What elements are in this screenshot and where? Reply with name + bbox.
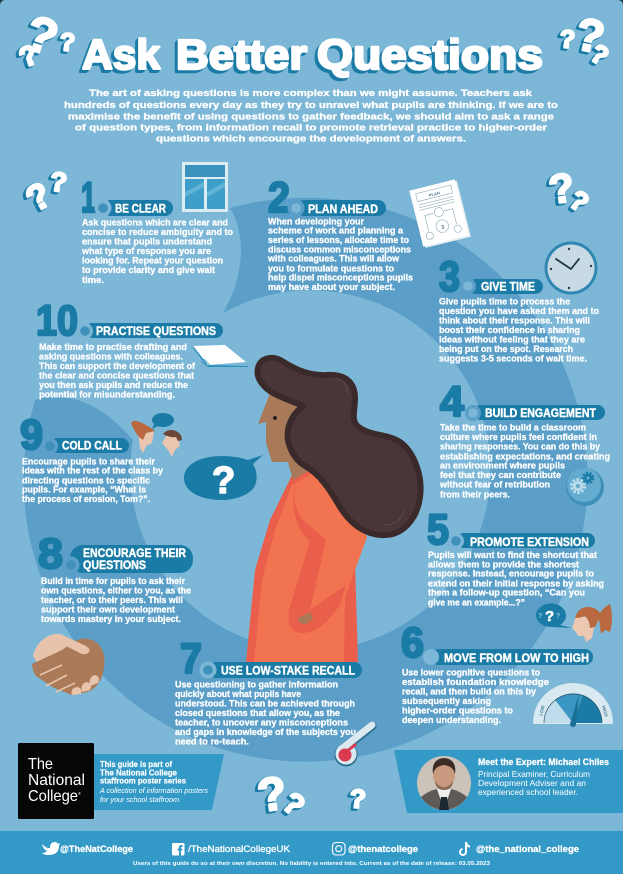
title: Ask (82, 31, 161, 78)
icon: two talking heads with bubble (131, 413, 182, 457)
body text: help dispel misconceptions pupils (268, 273, 413, 283)
panel: national college logo (18, 743, 94, 819)
question marks: top right: ? (558, 25, 576, 54)
body text: Use questioning to gather information (175, 679, 338, 689)
icon: gauge (533, 683, 613, 727)
icon: gears (566, 468, 604, 506)
intro paragraph: of question types, from information recall to promote retrieval practice to higher-order (75, 122, 547, 132)
body text: support their own development (41, 604, 175, 614)
heading pill: PROMOTE EXTENSION (470, 535, 589, 549)
body text: suggests 3-5 seconds of wait time. (439, 354, 587, 364)
body text: ensure that pupils understand (82, 236, 212, 246)
icon: pupil with question bubble: ? (545, 608, 554, 625)
question marks: top left: ? (58, 28, 76, 57)
body text: may have about your subject. (268, 282, 395, 292)
body text: what type of response you are (81, 246, 211, 256)
body text (175, 679, 356, 747)
question marks: bottom: ? (348, 783, 367, 814)
facebook handle: /TheNationalCollegeUK (188, 844, 291, 855)
heading pill: MOVE FROM LOW TO HIGH (444, 651, 589, 665)
question marks: top right of step 3 (546, 164, 594, 218)
instagram handle: @thenatcollege (348, 844, 418, 855)
body text: extend on their initial response by asking (428, 578, 604, 588)
body text: looking for. Repeat your question (82, 256, 223, 266)
body text (39, 342, 196, 399)
intro paragraph: questions which encourage the development of answers. (156, 132, 466, 144)
body text: Encourage pupils to share their (22, 456, 155, 466)
step 9: cold call (20, 411, 182, 504)
body text: Make time to practise drafting and (39, 342, 187, 352)
body text (41, 576, 191, 624)
body text: pupils. For example, “What is (22, 484, 146, 494)
step 2: plan ahead (267, 174, 471, 292)
question marks: top right: ? (585, 38, 614, 72)
body text: time. (82, 275, 104, 285)
number 10: 10 (36, 297, 78, 345)
icon: twitter (42, 842, 60, 855)
body text: teacher, or to their peers. This will (41, 595, 183, 605)
twitter handle: @TheNatCollege (60, 844, 133, 855)
intro paragraph: hundreds of questions every day as they try to unravel what pupils are thinking. If we are to (64, 99, 558, 110)
body text: you to formulate questions to (268, 263, 394, 273)
panel: poster series note: The National College (100, 768, 178, 778)
panel: national college logo: ® (78, 791, 81, 796)
tiktok handle: @the_national_college (476, 844, 579, 855)
body text: own questions, either to you, as the (41, 585, 191, 595)
panel: national college logo: The (28, 756, 53, 773)
heading pill: BUILD ENGAGEMENT (485, 406, 597, 420)
body text: When developing your (268, 216, 364, 226)
body text: need to re-teach. (175, 737, 249, 747)
body text: and gaps in knowledge of the subjects you (175, 727, 356, 737)
body text: Take the time to build a classroom (440, 423, 586, 433)
icon: pupil with question bubble: ? (556, 613, 560, 620)
body text (81, 218, 233, 285)
body text: recall, and then build on this by (402, 686, 537, 696)
heading pill: QUESTIONS (83, 558, 146, 572)
question marks: left of step 1 (18, 166, 69, 220)
icon: pupil with question bubble (536, 603, 612, 642)
body text: with colleagues. This will allow (267, 254, 400, 264)
disclaimer: Users of this guide do so at their own discretion. No liability is entered into. Current as of the date of release: 03.05.2023 (133, 861, 490, 867)
body text: directing questions to specific (22, 475, 150, 485)
question marks: top left (15, 4, 76, 74)
body text: Give pupils time to process the (439, 297, 570, 307)
body text: Pupils will want to find the shortcut that (428, 550, 597, 560)
panel: poster series note: A collection of information posters (99, 786, 208, 795)
number 3: 3 (439, 253, 460, 301)
number 1: 1 (81, 174, 96, 222)
body text: you then ask pupils and reduce the (39, 380, 188, 390)
body text: Ask questions which are clear and (82, 218, 228, 228)
hand (298, 612, 313, 624)
heading pill: USE LOW-STAKE RECALL (221, 664, 355, 678)
question marks: top left: ? (19, 4, 65, 67)
body text: question you have asked them and to (439, 306, 599, 316)
body text: culture where pupils feel confident in (440, 432, 597, 442)
face (258, 393, 320, 470)
hair (257, 358, 421, 535)
body text: teacher, to uncover any misconceptions (175, 717, 348, 727)
icon: book (193, 345, 248, 367)
body text: them a follow-up question, “Can you (428, 588, 585, 598)
step 8: encourage their questions (32, 530, 193, 695)
heading pill: PRACTISE QUESTIONS (96, 324, 216, 338)
body text: series of lessons, allocate time to (268, 235, 409, 245)
body text: scheme of work and planning a (268, 226, 404, 236)
heading pill: PLAN AHEAD (308, 202, 378, 216)
background spiral ring (24, 198, 588, 762)
expert text (478, 757, 609, 797)
question marks: top right of step 3: ? (564, 184, 594, 218)
panel: meet the expert (394, 750, 623, 813)
icon: clock (544, 242, 598, 294)
body text (267, 216, 413, 292)
panel: poster series note: for your school staffroom. (100, 795, 181, 804)
step 10: practise questions (36, 297, 248, 399)
icon: plan document: 3 (441, 224, 445, 231)
speech bubble with question mark (184, 455, 263, 502)
body text: without fear of retribution (439, 480, 550, 490)
body text: the clear and concise questions that (39, 371, 194, 381)
number 8: 8 (38, 530, 63, 578)
heading pill (460, 278, 543, 294)
panel: national college logo: National (28, 772, 85, 789)
body text: to provide clarity and give wait (82, 265, 215, 275)
question marks: bottom: ? (254, 765, 290, 822)
question marks: top right: ? (571, 7, 609, 64)
body text (439, 423, 610, 500)
step 6: move from low to high (401, 619, 613, 727)
question marks: left of step 1: ? (19, 173, 58, 220)
number 7: 7 (180, 635, 202, 683)
dress (246, 470, 367, 662)
panel: poster series note (94, 754, 224, 810)
panel: national college logo: College (28, 788, 78, 805)
body text: the process of erosion, Tom?”. (22, 494, 150, 504)
icon: instagram (332, 842, 345, 855)
title (82, 31, 543, 78)
body text: boost their confidence in sharing (439, 325, 580, 335)
body text: think about their response. This will (439, 316, 590, 326)
heading pill: ENCOURAGE THEIR (83, 546, 186, 560)
question marks: bottom: ? (276, 786, 311, 823)
heading pill (42, 438, 129, 454)
body text: concise to reduce ambiguity and to (82, 227, 233, 237)
icon: pupil with question bubble: ? (538, 613, 542, 620)
question marks: bottom (254, 765, 367, 823)
icon: facebook (172, 843, 184, 856)
body text (439, 297, 599, 364)
body text (428, 550, 604, 608)
expert text: Meet the Expert: Michael Chiles (478, 757, 609, 767)
body text (402, 668, 549, 725)
body text: This can support the development of (39, 361, 196, 371)
body text: quickly about what pupils have (175, 689, 301, 699)
body text: ideas with the rest of the class by (22, 466, 164, 476)
eye (273, 416, 277, 420)
heading pill (94, 200, 173, 216)
expert text: Development Adviser and an (478, 778, 586, 788)
expert text: experienced school leader. (478, 787, 578, 797)
heading pill (62, 545, 193, 574)
heading pill: BE CLEAR (115, 202, 166, 216)
body text: closed questions that allow you, as the (175, 708, 340, 718)
step 4: build engagement (439, 378, 610, 506)
body text: subsequently asking (402, 696, 491, 706)
icon: gauge: HIGH (601, 705, 609, 717)
step 7: use low-stake recall (175, 635, 372, 766)
body text: from their peers. (440, 490, 510, 500)
body text: sharing responses. You can do this by (440, 442, 601, 452)
neck (286, 455, 310, 480)
panel: poster series note: staffroom poster series (100, 776, 187, 786)
icon: plan document (409, 179, 471, 248)
body text: an environment where pupils (440, 461, 565, 471)
intro paragraph (64, 87, 558, 144)
question marks: top right of step 3: ? (546, 164, 577, 213)
footer bar (0, 831, 623, 874)
body text: understood. This can be achieved through (175, 698, 355, 708)
body text: Build in time for pupils to ask their (41, 576, 185, 586)
body text: towards mastery in your subject. (41, 614, 181, 624)
icon: gauge: LOW (538, 704, 546, 716)
step 5: promote extension (427, 506, 612, 642)
body text: being put on the spot. Research (439, 344, 573, 354)
body text: ideas without feeling that they are (439, 334, 585, 344)
heading pill: GIVE TIME (481, 280, 535, 294)
body text: give me an example...?” (428, 598, 525, 608)
step 3: give time (439, 242, 599, 364)
icon: handshake (32, 634, 104, 695)
heading pill (288, 200, 386, 216)
body text (22, 456, 164, 504)
expert photo (417, 756, 471, 810)
body text: asking questions with colleagues. (39, 352, 183, 362)
title: Questions (317, 31, 543, 78)
body text: establish foundation knowledge (402, 677, 549, 687)
body text: higher-order questions to (402, 705, 513, 715)
speech bubble with question mark: ? (212, 460, 235, 502)
question marks: top right (558, 7, 614, 72)
body text: potential for misunderstanding. (39, 389, 175, 399)
body text: allows them to provide the shortest (428, 559, 579, 569)
number 2: 2 (268, 174, 290, 222)
expert text: Principal Examiner, Curriculum (478, 769, 590, 779)
icon: plan document: PLAN (428, 190, 440, 198)
intro paragraph: maximise the benefit of using questions to gather feedback, we should aim to ask a range (68, 110, 554, 122)
icon: window (182, 162, 228, 212)
icon: tiktok (459, 842, 470, 856)
question marks: top left: ? (15, 38, 42, 74)
body text: response. Instead, encourage pupils to (428, 569, 594, 579)
step 1: be clear (81, 162, 233, 285)
number 5: 5 (427, 506, 449, 554)
dress front (254, 470, 367, 662)
body text: establishing expectations, and creating (440, 451, 610, 461)
title: Better (176, 31, 307, 78)
question marks: left of step 1: ? (48, 166, 69, 198)
panel: poster series note: This guide is part of (100, 760, 172, 769)
body text: discuss common misconceptions (268, 244, 411, 254)
figure: teacher in profile (246, 358, 421, 662)
intro paragraph: The art of asking questions is more complex than we might assume. Teachers ask (89, 87, 533, 98)
heading pill: COLD CALL (62, 438, 122, 452)
body text: deepen understanding. (402, 715, 501, 725)
body text: Use lower cognitive questions to (402, 668, 540, 678)
icon: thermometer (334, 725, 372, 766)
heading pill (200, 662, 362, 678)
body text: feel that they can contribute (440, 470, 561, 480)
number 4: 4 (440, 378, 464, 426)
number 9: 9 (20, 411, 43, 459)
arm stripe (288, 486, 346, 633)
number 6: 6 (401, 619, 424, 667)
